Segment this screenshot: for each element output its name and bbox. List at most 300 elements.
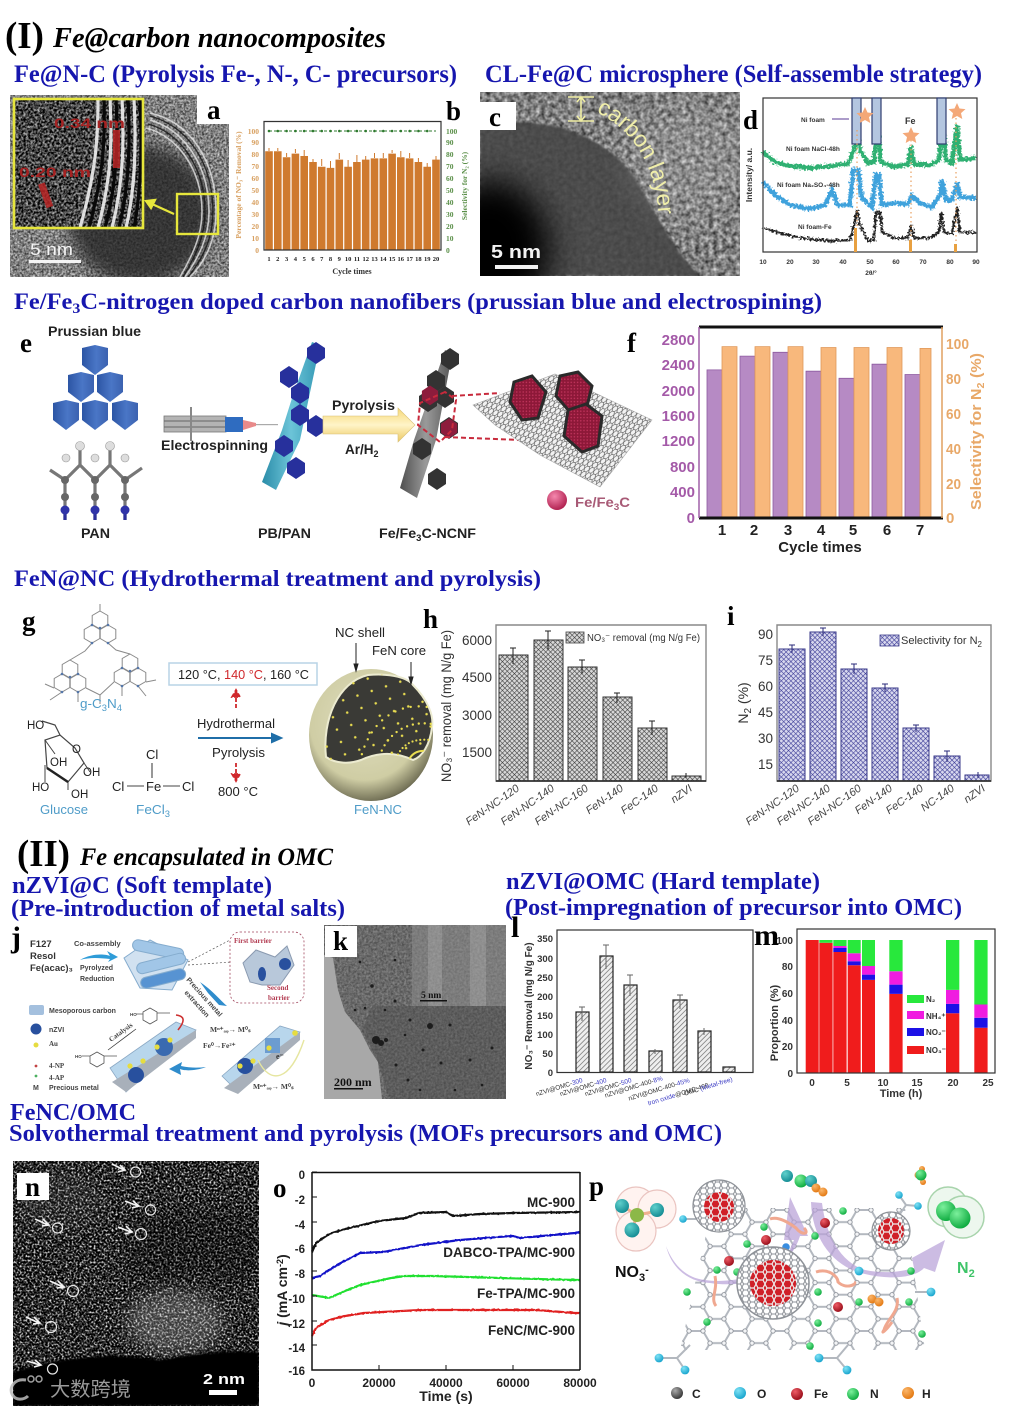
- section II title: Fe encapsulated in OMC: [79, 844, 333, 871]
- left axis ticks: 70: [252, 162, 259, 171]
- heading: nZVI@C: (Pre-introduction of metal salts): [11, 896, 345, 922]
- y ticks: 0: [787, 1069, 793, 1080]
- right axis: 20: [946, 476, 961, 493]
- floating gas molecules: [781, 1166, 926, 1306]
- orange squiggles: [714, 1218, 897, 1332]
- panel n: dark-field micrograph: [13, 1161, 259, 1406]
- panel a: TEM micrograph: [10, 95, 229, 285]
- left axis: 1200: [662, 433, 695, 450]
- right axis ticks: 60: [446, 174, 454, 183]
- glucose structure: OH: [83, 767, 100, 779]
- g-C3N4 structure: [45, 604, 156, 704]
- trace labels: Ni foam: [801, 117, 825, 124]
- x labels: FeN-NC-140: [499, 782, 557, 828]
- x labels: FeC-140: [884, 782, 926, 817]
- axis text: 10: [759, 259, 767, 266]
- y ticks: 200: [537, 992, 553, 1003]
- NC shell pointer: NC shell: [335, 626, 385, 640]
- temperature box: 120 °C, 140 °C, 160 °C: [178, 667, 309, 682]
- x ticks: 13: [371, 256, 378, 263]
- legend: [907, 995, 946, 1055]
- x ticks: 14: [380, 256, 387, 263]
- legend: nZVI: [49, 1027, 64, 1034]
- section I title: [5, 15, 386, 57]
- left axis ticks: 30: [252, 210, 259, 219]
- right axis title: 2: [976, 382, 987, 388]
- label n: n: [25, 1172, 40, 1202]
- catalysis tube: HO: [130, 1012, 137, 1017]
- x tick labels: [309, 1376, 597, 1390]
- precursor list: F127: [30, 939, 52, 950]
- panel m: stacked proportion bars: [769, 929, 995, 1100]
- frame: [557, 930, 753, 1072]
- panel j: soft template schematic: [10, 921, 304, 1094]
- axis text: 80: [946, 259, 954, 266]
- y ticks: 60: [782, 989, 793, 1000]
- y ticks: [776, 936, 793, 1080]
- co-assembly arrow: Reduction: [80, 976, 114, 983]
- glucose structure: HO: [32, 782, 49, 794]
- left axis: 2000: [662, 383, 695, 400]
- reference strips: [852, 98, 946, 144]
- x ticks: 7: [320, 256, 324, 263]
- x ticks: 10: [877, 1078, 889, 1089]
- hydrothermal text: Hydrothermal: [197, 716, 275, 731]
- legend ball: [547, 490, 630, 512]
- legend: 4-NP: [49, 1062, 65, 1070]
- y ticks: 75: [758, 653, 773, 668]
- x ticks: [809, 1078, 994, 1100]
- FeN core pointer: FeN core: [372, 644, 426, 658]
- x labels: [535, 1075, 734, 1107]
- circled atoms with arrows: [26, 1164, 156, 1374]
- scale bar: [491, 242, 541, 269]
- x ticks: Time (h): [880, 1088, 923, 1100]
- y ticks: 15: [758, 757, 773, 772]
- atom legend: [671, 1387, 931, 1401]
- y tick labels: -10: [288, 1294, 305, 1306]
- y title: Proportion (%): [769, 984, 781, 1061]
- right axis: 60: [946, 406, 961, 423]
- x ticks: 20: [947, 1078, 959, 1089]
- y ticks: 100: [537, 1030, 553, 1041]
- x tick labels: 40000: [429, 1376, 463, 1390]
- barrier inset: barrier: [268, 994, 290, 1002]
- panel k: TEM micrograph: [324, 925, 506, 1099]
- label c: c: [489, 102, 501, 132]
- x ticks: 3: [285, 256, 289, 263]
- y ticks: 300: [537, 954, 553, 965]
- left axis ticks: 0: [255, 246, 259, 255]
- right axis ticks: 50: [446, 186, 454, 195]
- label f: f: [627, 328, 637, 358]
- selectivity line: [269, 130, 436, 132]
- pyrolysis arrow: Ar/H: [345, 442, 374, 457]
- x axis: Cycle times: [778, 539, 862, 556]
- panel l: NO3 removal bars: [524, 930, 753, 1107]
- heading: FeNC/OMC: Solvothermal treatment and pyrolysis (MOFs precursors and OMC): [9, 1121, 722, 1147]
- watermark: [11, 1376, 131, 1401]
- left axis: [662, 332, 695, 527]
- x labels: FeN-NC-120: [464, 782, 522, 828]
- y ticks: 80: [782, 962, 793, 973]
- legend: NH₄⁺: [926, 1012, 946, 1021]
- inset frame: [14, 99, 143, 228]
- label a: a: [207, 95, 221, 125]
- left axis ticks: 20: [252, 222, 259, 231]
- axis text: 60: [892, 259, 900, 266]
- NC shell pointer: [335, 626, 385, 671]
- x ticks: 20: [433, 256, 439, 263]
- x ticks: 4: [294, 256, 298, 263]
- axis text: 50: [866, 259, 874, 266]
- watermark: 大数跨境: [50, 1378, 131, 1401]
- atom legend: O: [757, 1387, 766, 1401]
- y tick labels: -2: [295, 1195, 305, 1207]
- atom legend: Fe: [814, 1387, 828, 1401]
- left axis: 800: [670, 459, 695, 476]
- FeN core pointer: [372, 644, 426, 684]
- x ticks: 10: [345, 256, 351, 263]
- panel c: carbon layer micrograph: [480, 92, 740, 276]
- g-C3N4 label: g-C: [80, 696, 101, 711]
- label h: h: [423, 604, 438, 634]
- left axis ticks: [248, 127, 259, 255]
- section II title: [17, 833, 333, 875]
- right axis ticks: 90: [446, 138, 454, 147]
- legend: M: [33, 1085, 39, 1092]
- left axis ticks: 50: [252, 186, 259, 195]
- error bars: [579, 945, 729, 1068]
- glucose structure: O: [72, 744, 81, 756]
- inset scale: 5 nm: [421, 991, 441, 1001]
- atom legend: C: [692, 1387, 701, 1401]
- reaction labels: Fe⁰→Fe²⁺: [203, 1041, 236, 1050]
- frame: [763, 98, 977, 252]
- right axis: 100: [946, 336, 969, 353]
- zoom dashes: [188, 940, 232, 965]
- y title: NO₃⁻ Removal (mg N/g Fe): [524, 942, 535, 1070]
- label i: i: [727, 601, 735, 631]
- large fullerene: [737, 1247, 809, 1319]
- frame: [496, 625, 706, 781]
- left axis: 2800: [662, 332, 695, 349]
- pyrolysis text: Pyrolysis: [212, 745, 266, 760]
- x labels: FeN-NC-160: [806, 782, 864, 828]
- axis text: 40: [839, 259, 847, 266]
- NH4 series: [833, 946, 988, 1018]
- panel b: bar chart, NO3 removal and selectivity: [234, 96, 469, 276]
- x ticks: 12: [362, 256, 369, 263]
- panel i: N2 selectivity bars: [735, 625, 991, 828]
- x labels: OMC (Metal-free): [683, 1076, 734, 1098]
- axis text: 70: [919, 259, 927, 266]
- x labels: FeN-NC-160: [533, 782, 591, 828]
- y ticks: 90: [758, 627, 773, 642]
- extraction arrow: [200, 982, 227, 1006]
- right axis title: (%): [968, 353, 985, 382]
- inset: lattice fringes: 0.20 nm: [19, 164, 91, 180]
- x tick labels: 20000: [362, 1376, 396, 1390]
- right axis ticks: 40: [446, 198, 454, 207]
- small fullerene: [872, 1212, 910, 1250]
- barrier inset: [230, 932, 304, 1003]
- y title: N: [735, 714, 751, 724]
- frame: [777, 625, 991, 781]
- panel g: synthesis schematic: [22, 604, 435, 819]
- label l: l: [511, 911, 519, 944]
- branch bonds: [659, 1195, 931, 1370]
- x labels: [744, 782, 988, 828]
- series labels: FeNC/MC-900: [488, 1323, 575, 1338]
- trace labels: [777, 117, 840, 231]
- label d: d: [743, 105, 758, 135]
- PB/PAN fibre: [262, 342, 325, 490]
- x ticks: 19: [424, 256, 431, 263]
- NO2 series: [833, 948, 988, 1028]
- NO3 molecule in halo: [615, 1187, 676, 1251]
- NO3- label: NO: [615, 1264, 639, 1281]
- trace labels: Ni foam NaCl-48h: [786, 146, 840, 153]
- oxygen atoms: [655, 1191, 935, 1374]
- temperature box: [169, 663, 317, 685]
- glucose structure: [27, 720, 100, 801]
- legend: [29, 1005, 116, 1092]
- FeCl3 label: 3: [165, 809, 170, 819]
- legend: Precious metal: [49, 1085, 99, 1092]
- x labels: nZVI@OMC-400-45%: [628, 1077, 691, 1103]
- g-C3N4 label: 4: [117, 703, 122, 713]
- catalysis tube: [75, 1008, 196, 1092]
- FeCl3 structure: Fe: [146, 779, 161, 794]
- x axis: 5: [849, 522, 857, 539]
- label g: g: [22, 606, 36, 636]
- extraction tube: [222, 1026, 304, 1094]
- N2 molecule in halo: [928, 1187, 984, 1238]
- y ticks: 20: [782, 1042, 793, 1053]
- red curve: [312, 1310, 580, 1336]
- y title: NO₃⁻ removal (mg N/g Fe): [439, 630, 454, 782]
- x labels: nZVI@OMC-300: [535, 1077, 584, 1098]
- y title: (%): [735, 682, 751, 708]
- axis titles: Selectivity for N₂ (%): [460, 151, 469, 220]
- PB/PAN label: PB/PAN: [258, 526, 311, 541]
- x labels: nZVI@OMC-400: [559, 1077, 608, 1098]
- y ticks: 6000: [462, 633, 492, 648]
- x ticks: 9: [338, 256, 342, 263]
- scale bar: [203, 1371, 245, 1395]
- x axis: 1: [718, 522, 726, 539]
- y ticks: 100: [776, 936, 793, 947]
- frame: [699, 327, 943, 518]
- x labels: Iron oxide@OMC-400: [647, 1082, 710, 1107]
- scale bar: [29, 240, 81, 263]
- section I title: Fe@carbon nanocomposites: [52, 23, 386, 54]
- barrier inset: Second: [267, 984, 288, 992]
- y tick labels: 0: [299, 1170, 305, 1182]
- x labels: nZVI@OMC-500: [584, 1077, 633, 1098]
- y tick labels: -8: [295, 1269, 306, 1281]
- catalysis tube: Catalysis: [107, 1021, 134, 1044]
- left axis ticks: 60: [252, 174, 259, 183]
- legend: 2: [978, 640, 983, 649]
- Fe/Fe3C-NCNF label: Fe/Fe: [379, 526, 414, 541]
- y tick labels: -4: [295, 1220, 306, 1232]
- axis text: 2θ/°: [865, 269, 877, 277]
- x ticks: [267, 256, 439, 263]
- right axis title: Selectivity for N: [968, 397, 985, 510]
- curved label: carbon layer: carbon layer: [598, 103, 671, 214]
- left axis ticks: 90: [252, 138, 259, 147]
- heading: nZVI@OMC: (Post-impregnation of precursor into OMC): [505, 895, 962, 921]
- black curve: [312, 1212, 580, 1252]
- co-assembly arrow: [74, 939, 122, 983]
- NO3- label: -: [645, 1264, 649, 1276]
- legend ball: Fe/Fe: [575, 495, 610, 510]
- y ticks: 0: [548, 1068, 553, 1079]
- x labels: FeN-140: [584, 782, 626, 817]
- Fe/Fe3C-NCNF fibre: [400, 348, 459, 498]
- reaction labels: Mⁿ⁺ₐᵩ→ M⁰ₛ: [253, 1082, 294, 1091]
- x labels: FeC-140: [619, 782, 661, 817]
- legend: NO₃⁻: [926, 1046, 946, 1055]
- x ticks: 1: [267, 256, 271, 263]
- x tick labels: 60000: [496, 1376, 530, 1390]
- syringe: [164, 407, 278, 441]
- blue trace: [763, 170, 976, 209]
- x ticks: 17: [406, 256, 414, 263]
- y title: -2: [275, 1259, 285, 1267]
- red arrow up: [232, 690, 240, 708]
- right axis ticks: 100: [446, 127, 458, 136]
- purple bars: [707, 352, 920, 518]
- blue process arrow: [198, 734, 281, 742]
- extraction tube: e⁻: [276, 1052, 284, 1061]
- legend: [880, 635, 983, 649]
- orange bars: [722, 347, 931, 518]
- legend: Selectivity for N: [901, 635, 977, 647]
- pyrolysis arrow: 2: [374, 449, 379, 459]
- x ticks: 6: [311, 256, 315, 263]
- FeN-NC sphere: [309, 669, 435, 801]
- y tick labels: -12: [288, 1319, 305, 1331]
- green curve: [312, 1276, 580, 1298]
- selection box: [177, 194, 218, 234]
- y tick marks: [312, 1172, 513, 1370]
- label j: j: [10, 921, 21, 954]
- PAN molecule: [50, 442, 142, 520]
- heading: nZVI@OMC: nZVI@OMC (Hard template): [506, 869, 820, 895]
- 800 C text: 800 °C: [218, 784, 258, 799]
- heading: nZVI@C: [11, 873, 345, 922]
- medium fullerene: [693, 1180, 745, 1232]
- left axis: 2400: [662, 357, 695, 374]
- heading: FeNC/OMC: FeNC/OMC: [10, 1100, 136, 1126]
- bars: [576, 956, 735, 1072]
- inset: lattice fringes: 0.34 nm: [54, 115, 125, 131]
- x ticks: 15: [911, 1078, 923, 1089]
- PAN label: PAN: [81, 526, 110, 541]
- x labels: FeN-NC-140: [775, 782, 833, 828]
- y ticks: 50: [542, 1049, 553, 1060]
- axis text: 20: [786, 259, 794, 266]
- stars: [856, 103, 966, 143]
- x ticks: 5: [844, 1078, 850, 1089]
- black trace: [763, 207, 976, 241]
- glucose structure: OH: [71, 789, 88, 801]
- extraction text second line: extraction: [183, 990, 210, 1019]
- reaction labels: [203, 1025, 294, 1091]
- g-C3N4 label: N: [107, 696, 117, 711]
- co-assembly arrow: Co-assembly: [74, 939, 122, 948]
- heading: CL-Fe@C: CL-Fe@C microsphere (Self-assemble strategy): [485, 61, 982, 88]
- blue curve: [312, 1232, 580, 1278]
- y ticks: 3000: [462, 708, 492, 723]
- trace labels: Ni foam Na₂SO₄-48h: [777, 182, 840, 189]
- pyrolysis arrow: [323, 397, 415, 459]
- precursor list: [30, 939, 73, 974]
- section II title: (II): [17, 833, 70, 875]
- N2 label: 2: [969, 1268, 975, 1280]
- y ticks: 350: [537, 934, 553, 945]
- barrier inset: First barrier: [234, 937, 272, 945]
- arrow to inset: [146, 200, 174, 214]
- Prussian blue cubes: Prussian blue: [48, 324, 142, 339]
- right axis ticks: 0: [446, 246, 450, 255]
- frame: [312, 1172, 580, 1370]
- y ticks: 4500: [462, 670, 492, 685]
- y ticks: 1500: [462, 745, 492, 760]
- FeCl3 structure: Cl: [112, 779, 124, 794]
- x ticks: 2: [276, 256, 279, 263]
- y tick labels: [288, 1170, 306, 1378]
- Electrospinning label: Electrospinning: [161, 437, 268, 453]
- label k: k: [333, 926, 348, 956]
- x axis: 6: [883, 522, 891, 539]
- co-assembly arrow: Pyrolyzed: [80, 965, 113, 972]
- series labels: [443, 1195, 575, 1338]
- axis text: Intensity/ a.u.: [744, 148, 754, 202]
- label n: [17, 1172, 49, 1202]
- heading: Fe@N-C: Fe@N-C (Pyrolysis Fe-, N-, C- precursors): [14, 61, 457, 88]
- x labels: NC-140: [919, 782, 957, 814]
- extraction text: Precious metal: [185, 977, 223, 1018]
- FeCl3 label: FeCl: [136, 802, 163, 817]
- heading: Fe/Fe3C nanofibers: C-nitrogen doped carbon nanofibers (prussian blue and electrospining): [80, 289, 822, 314]
- x labels: nZVI: [962, 783, 988, 806]
- x ticks: 25: [982, 1078, 994, 1089]
- series labels: DABCO-TPA/MC-900: [443, 1245, 575, 1260]
- right axis: [946, 336, 969, 527]
- y title: j (mA cm: [274, 1267, 290, 1326]
- x tick labels: 80000: [563, 1376, 597, 1390]
- left axis ticks: 10: [252, 234, 259, 243]
- iron atoms: [724, 1218, 843, 1312]
- bars: [779, 632, 989, 781]
- glucose structure: HO: [27, 720, 44, 732]
- x ticks: 0: [809, 1078, 815, 1089]
- label c: [480, 102, 516, 132]
- scale bar: 5 nm: [491, 242, 541, 262]
- Ni foam pointer and Fe label: Fe: [905, 116, 916, 126]
- x labels: nZVI: [669, 783, 695, 806]
- left axis ticks: 100: [248, 127, 259, 136]
- x tick labels: 0: [309, 1376, 316, 1390]
- panel e: electrospinning schematic: [20, 324, 652, 543]
- series labels: MC-900: [527, 1195, 575, 1210]
- thickness marker: [568, 97, 594, 121]
- bars: [499, 640, 701, 781]
